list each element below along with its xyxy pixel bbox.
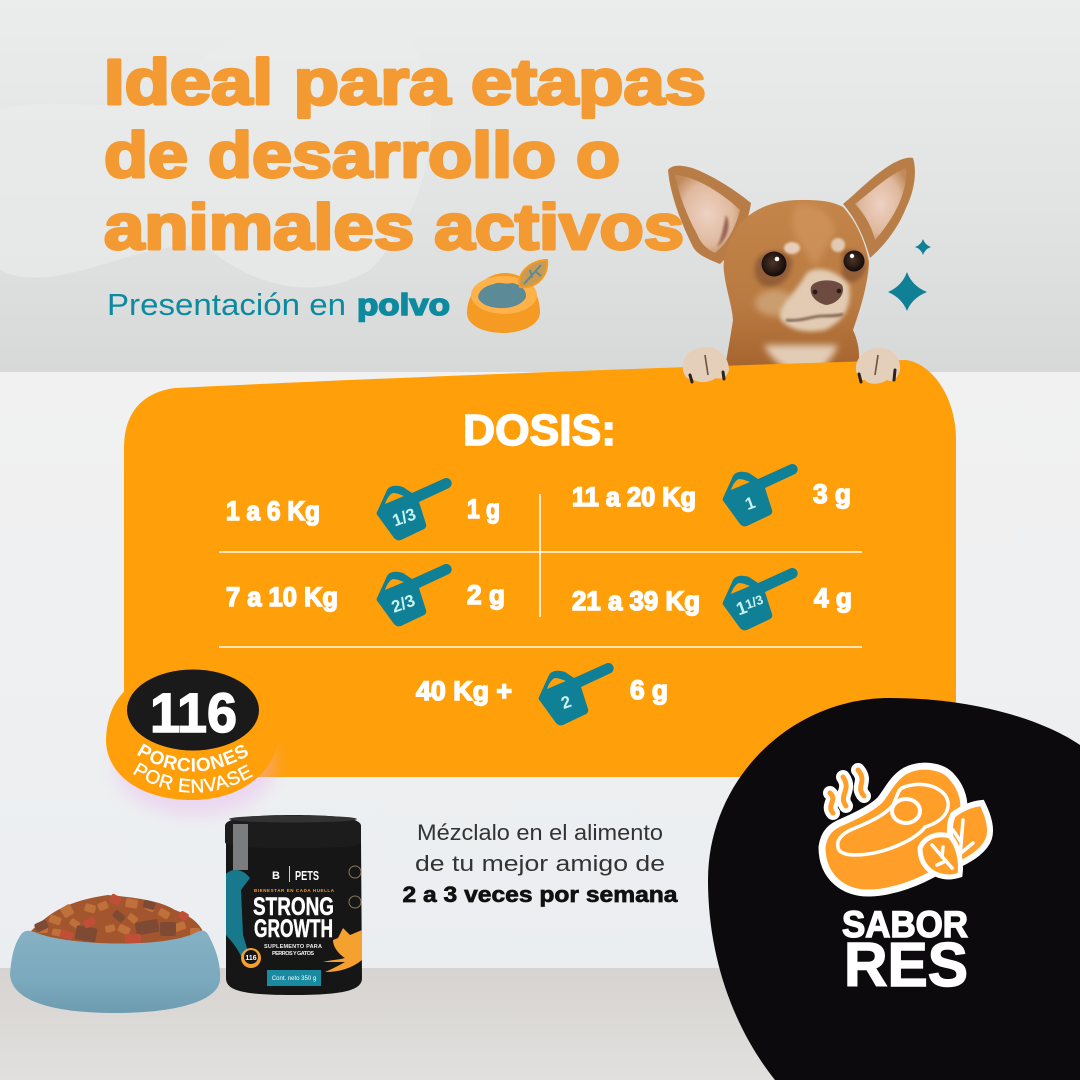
jar lid: [225, 815, 361, 848]
dog cheek: [755, 290, 795, 316]
jar side icons: [349, 866, 361, 908]
scoop 2/3: [377, 564, 452, 626]
scoop 1: 1: [742, 493, 758, 514]
product jar: [225, 815, 362, 995]
dog head and neck: [724, 200, 869, 374]
dog right eye: [844, 250, 864, 272]
scoop 1 1/3: 1: [733, 597, 750, 619]
dog eye sockets: [755, 251, 792, 287]
row: 11 a 20 Kg: 11 a 20 Kg: [572, 482, 696, 512]
subtitle: presentación en polvo: polvo: [357, 287, 450, 322]
badge: 116 porciones por envase: PORCIONES: [137, 744, 248, 772]
row: 7 a 10 Kg: 2 g: [467, 580, 505, 610]
subtitle: presentación en polvo: [107, 287, 450, 322]
jar brand: PETS: [295, 868, 319, 883]
jar tagline: BIENESTAR EN CADA HUELLA: [254, 888, 335, 893]
usage instructions text: de tu mejor amigo de: [415, 851, 665, 876]
title: animales activos: [104, 191, 684, 263]
dog brows: [784, 242, 800, 254]
jar product name: STRONG: [253, 893, 334, 921]
row: 7 a 10 Kg: [226, 580, 505, 612]
badge: 116 porciones por envase: 116: [150, 681, 237, 744]
usage instructions text: [402, 820, 678, 907]
row: 1 a 6 Kg: 1 a 6 Kg: [226, 496, 320, 526]
row: 40 Kg +: 40 Kg +: [416, 676, 512, 706]
blue bowl: [10, 931, 220, 1013]
row: 40 Kg +: 6 g: [630, 675, 668, 705]
flavour label: SABOR: [842, 904, 968, 945]
jar net content: Cont. neto 350 g: [272, 976, 316, 982]
dog nose: [811, 280, 843, 305]
jar subtitle: SUPLEMENTO PARA: [264, 944, 322, 950]
table divider lines: [219, 494, 862, 647]
row: 11 a 20 Kg: [572, 479, 851, 512]
dog paw left: [683, 347, 729, 382]
subtitle: presentación en polvo: Presentación en: [107, 287, 346, 322]
panel: dosis: [124, 360, 956, 777]
scoop 2/3: 2/3: [389, 591, 418, 617]
scoop 2: 2: [558, 692, 574, 713]
dog right ear: [843, 158, 915, 258]
flavour label: [842, 904, 968, 1000]
food bowl with kibble: [10, 893, 220, 1013]
jar brand: [272, 866, 319, 883]
scoop 1/3: [377, 478, 452, 540]
icon: steam: [830, 770, 864, 813]
scoop 1 1/3: 1/3: [743, 592, 765, 612]
row: 21 a 39 Kg: [572, 583, 852, 616]
icon: sparkle large: [888, 272, 927, 311]
usage instructions text: 2 a 3 veces por semana: [402, 882, 678, 907]
jar net content: [267, 970, 321, 986]
row: 11 a 20 Kg: 3 g: [813, 479, 851, 509]
icon: sparkle small: [915, 239, 931, 255]
badge: 116 porciones por envase: POR ENVASE: [133, 762, 253, 793]
seal: [233, 824, 248, 870]
jar 116 seal: [241, 948, 261, 968]
jar brand: B: [272, 870, 280, 882]
row: 1 a 6 Kg: 1 g: [467, 494, 500, 524]
row: 7 a 10 Kg: 7 a 10 Kg: [226, 582, 338, 612]
dog chest: [764, 345, 838, 374]
scoop 1 1/3: [723, 568, 798, 630]
dog photo illustration: [668, 158, 915, 374]
title: de desarrollo o: [104, 119, 620, 191]
flavour label: RES: [844, 931, 968, 1000]
badge: 116 porciones por envase: [106, 670, 284, 818]
jar subtitle: PERROS Y GATOS: [272, 951, 314, 957]
usage instructions text: Mézclalo en el alimento: [417, 820, 663, 845]
icon: powder bowl: [467, 260, 547, 333]
jar cat silhouette: [323, 928, 362, 972]
dog left ear: [668, 166, 751, 264]
kibble pile: [28, 893, 204, 950]
dog muzzle: [780, 269, 850, 331]
row: 21 a 39 Kg: 21 a 39 Kg: [572, 586, 700, 616]
row: 40 Kg +: [416, 675, 668, 706]
scoop 2: [539, 663, 614, 725]
scoop 1: [723, 464, 798, 526]
dog left eye: [762, 252, 786, 276]
row: 21 a 39 Kg: 4 g: [814, 583, 852, 613]
scoop 1/3: 1/3: [390, 504, 419, 530]
jar product name: [253, 893, 334, 943]
jar 116 seal: 116: [245, 955, 257, 962]
dog mouth: [786, 314, 843, 320]
dog paw right: [856, 348, 900, 384]
row: 1 a 6 Kg: [226, 494, 500, 526]
title: Ideal para etapas: [104, 46, 706, 118]
jar product name: GROWTH: [254, 915, 333, 943]
panel: sabor res: [708, 698, 1080, 1080]
heading: dosis: DOSIS:: [463, 406, 616, 455]
jar dog silhouette: [226, 870, 250, 960]
title: [104, 46, 706, 263]
icon: steak with leaves: [822, 766, 990, 893]
jar subtitle: [264, 944, 322, 957]
